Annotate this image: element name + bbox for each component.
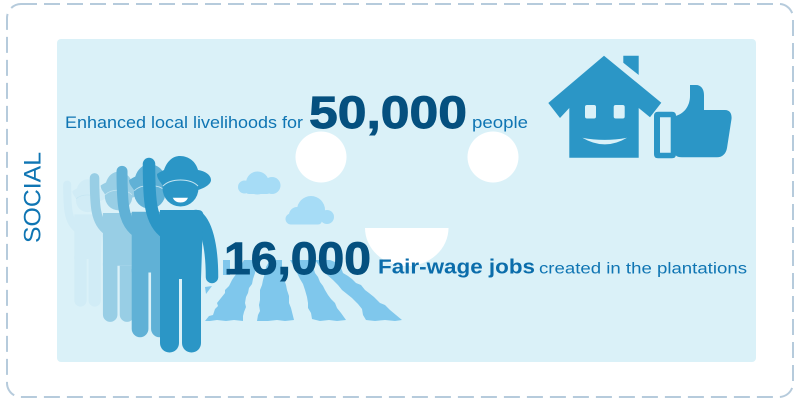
icon: plantation field rows [205,260,402,321]
text: enhanced livelihoods statistic: people [472,113,528,132]
worker figure, medium [122,164,177,337]
icon: cloud left [238,172,280,194]
icon: thumbs up [654,85,732,158]
text: enhanced livelihoods statistic: 50,000 [309,87,467,138]
worker figure, light [95,172,143,322]
worker figure, front [149,156,212,352]
heading: SOCIAL: SOCIAL [20,152,46,243]
decorative white sun left [296,132,346,182]
text: fair-wage jobs statistic: 16,000 [224,233,371,284]
text: enhanced livelihoods statistic: Enhanced local livelihoods for [65,113,303,132]
text: enhanced livelihoods statistic [65,87,528,138]
text: fair-wage jobs statistic: created in the plantations [539,260,747,278]
text: fair-wage jobs statistic [224,233,747,284]
icon: smiling house [548,56,661,158]
decorative white half circle [365,228,448,266]
decorative white sun right [468,132,518,182]
panel: social background [57,39,756,362]
icon: cloud right [286,196,334,224]
worker figure, faintest [67,179,108,307]
text: fair-wage jobs statistic: Fair-wage jobs [378,256,535,278]
